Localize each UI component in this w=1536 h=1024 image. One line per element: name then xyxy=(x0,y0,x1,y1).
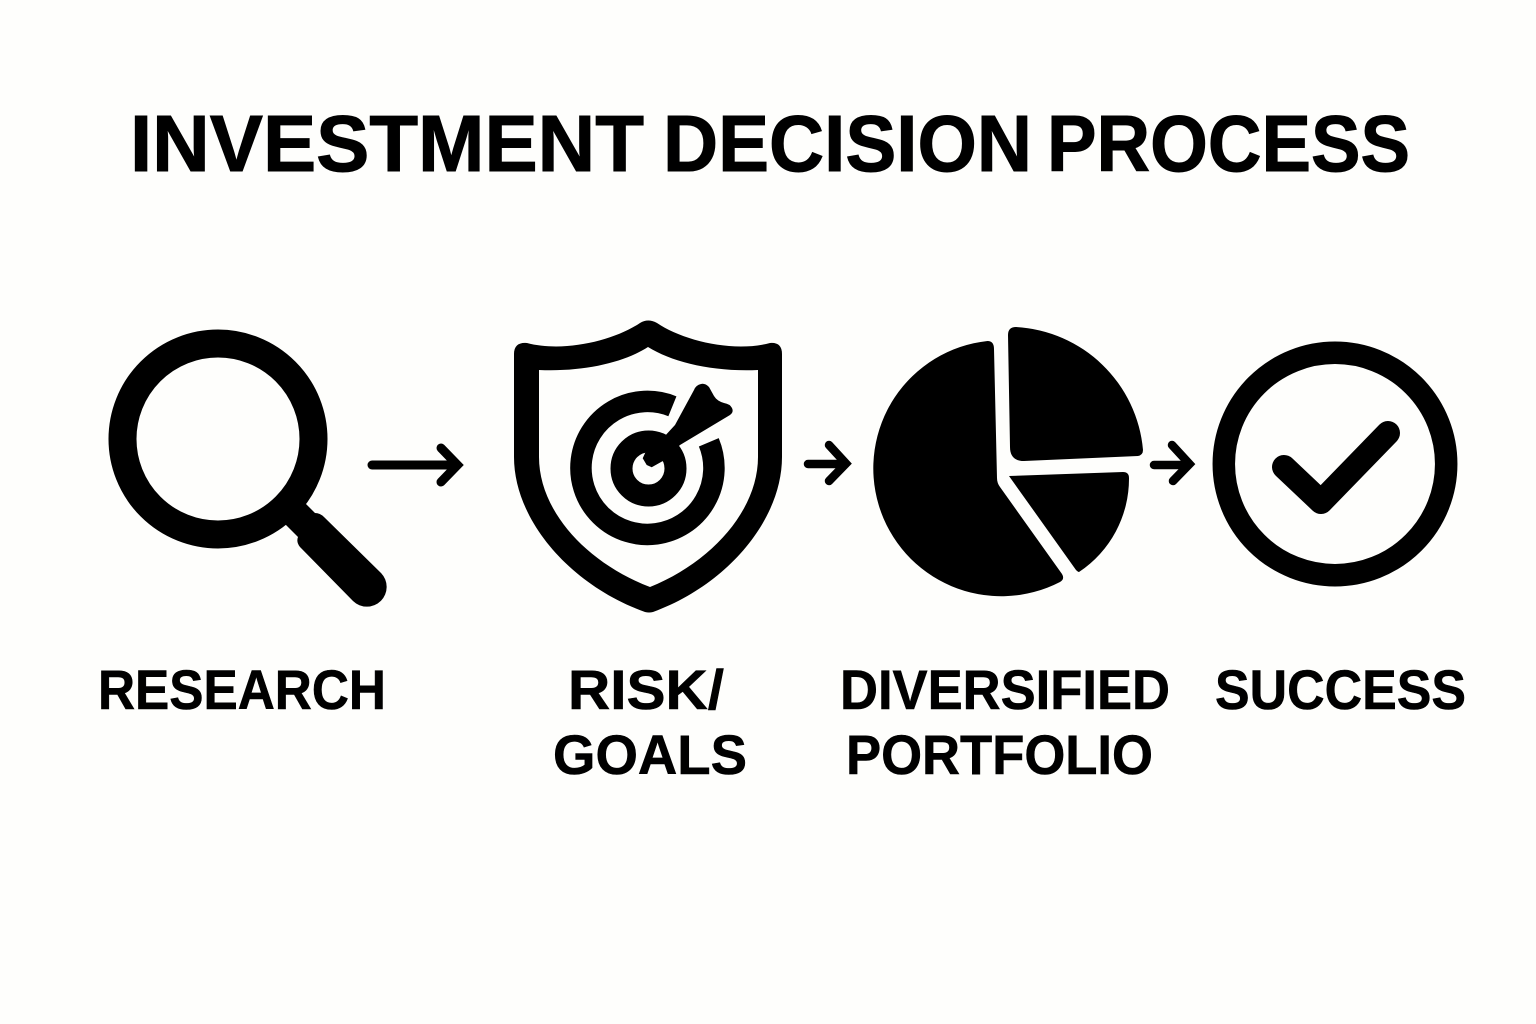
label: diversified portfolio: DIVERSIFIED xyxy=(840,658,1170,721)
label: risk / goals xyxy=(553,658,747,786)
target arrow xyxy=(643,384,733,467)
icon: magnifying glass xyxy=(122,344,387,607)
upper right slice xyxy=(1008,327,1143,461)
icon: pie chart xyxy=(873,327,1143,596)
label: diversified portfolio xyxy=(840,658,1170,786)
label: diversified portfolio: PORTFOLIO xyxy=(846,723,1153,786)
shield outline xyxy=(514,320,782,612)
title: INVESTMENT xyxy=(130,99,644,188)
icon: shield with target xyxy=(514,320,782,612)
icon: success check circle xyxy=(1224,353,1446,575)
large slice xyxy=(873,341,1063,596)
arrow: risk to portfolio xyxy=(808,445,846,481)
label: research: RESEARCH xyxy=(98,658,386,721)
target outer ring xyxy=(581,401,714,534)
lower right slice xyxy=(1009,472,1129,572)
title: DECISION xyxy=(663,99,1032,188)
title: PROCESS xyxy=(1047,99,1410,188)
label: success: SUCCESS xyxy=(1215,658,1466,721)
title xyxy=(130,99,1410,188)
label: risk / goals: GOALS xyxy=(553,723,747,786)
target inner ring xyxy=(622,442,676,496)
arrow: portfolio to success xyxy=(1154,445,1190,481)
label: risk / goals: RISK/ xyxy=(568,658,724,721)
arrow: research to risk xyxy=(372,448,458,482)
